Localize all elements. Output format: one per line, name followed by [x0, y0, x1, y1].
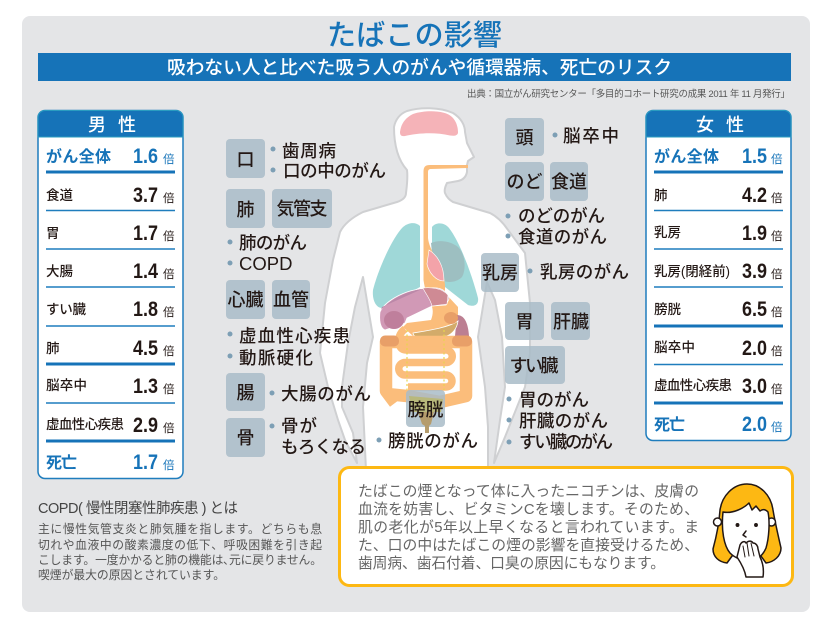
label: lung and bronchi: COPD: [239, 253, 292, 274]
panel: male table: 1.7: [133, 451, 158, 474]
panel: female table: 倍: [771, 268, 783, 281]
nose: [743, 531, 746, 537]
label: heart and vessels: 動脈硬化: [239, 348, 313, 368]
label: stomach liver pancreas: [505, 302, 613, 452]
label: intestine: 腸: [236, 383, 254, 403]
organ: gallbladder: [384, 311, 404, 329]
female header: 性: [726, 115, 744, 135]
panel: male table: 倍: [163, 268, 175, 281]
label: bone: 骨: [236, 428, 254, 448]
panel: female table: 4.2: [742, 184, 767, 207]
icon: woman covering mouth: [713, 484, 781, 577]
COPD explanation: 喫煙が最大の原因とされています。: [38, 568, 225, 582]
panel: male table: 倍: [163, 230, 175, 243]
eyes: [736, 524, 739, 526]
panel: female table: 虚血性心疾患: [654, 378, 732, 393]
panel: male table: 大腸: [46, 264, 74, 279]
panel: male table: 倍: [163, 153, 175, 166]
label: head: 脳卒中: [563, 126, 619, 146]
panel: male table: 1.6: [133, 145, 158, 168]
panel: female table: 倍: [771, 421, 783, 434]
label: lung and bronchi: 気管支: [276, 199, 328, 219]
label: mouth: 口の中のがん: [283, 161, 386, 181]
hand: [737, 541, 763, 577]
label: mouth: 歯周病: [282, 141, 336, 161]
subtitle banner: 吸わない人と比べた吸う人のがんや循環器病、死亡のリスク: [167, 57, 672, 78]
label: lung and bronchi: 肺のがん: [239, 233, 307, 253]
label: heart and vessels: [226, 280, 350, 368]
face: [722, 503, 769, 561]
COPD explanation: [38, 500, 322, 582]
callout: nicotine: 肌の老化が5年以上早くなると言われています。ま: [358, 519, 699, 536]
label: throat and esophagus: [505, 162, 607, 247]
panel: female table: 2.0: [742, 337, 767, 360]
panel: male table: 脳卒中: [46, 378, 87, 393]
body illustration: [320, 108, 530, 470]
organ: liver: [380, 288, 449, 330]
label: head: [505, 118, 619, 156]
label: intestine: [226, 373, 371, 411]
organ: right lung: [432, 223, 478, 306]
label: stomach liver pancreas: 肝臓: [553, 312, 589, 332]
panel: male table: 倍: [163, 422, 175, 435]
organ: stomach overlap: [423, 288, 448, 306]
label: stomach liver pancreas: 胃のがん: [519, 390, 589, 410]
panel: male table: 倍: [163, 192, 175, 205]
panel: female table: 6.5: [742, 298, 767, 321]
label: mouth: 口: [236, 150, 254, 170]
label: bladder: [376, 390, 478, 451]
panel: female table: 死亡: [654, 416, 685, 434]
panel: female table: 2.0: [742, 413, 767, 436]
organ: colon overlap shading: [380, 312, 472, 346]
organ: pancreas: [413, 321, 458, 338]
organ: large intestine: [386, 342, 466, 403]
organ: left lung: [373, 223, 420, 308]
organ: bladder: [409, 396, 443, 412]
organ: esophagus and stomach: [403, 165, 468, 337]
COPD explanation: こします。一度かかると肺の機能は､元に戻りません。: [38, 553, 322, 567]
label: stomach liver pancreas: 肝臓のがん: [519, 411, 608, 431]
COPD explanation: COPD( 慢性閉塞性肺疾患 ) とは: [38, 500, 238, 517]
panel: male table: 倍: [163, 345, 175, 358]
callout: nicotine: 歯周病、歯石付着、口臭の原因にもなります。: [358, 555, 665, 572]
label: heart and vessels: 虚血性心疾患: [239, 326, 350, 346]
panel: female table: 1.5: [742, 145, 767, 168]
ears: [714, 518, 722, 526]
callout: nicotine: たばこの煙となって体に入ったニコチンは、皮膚の: [358, 483, 699, 500]
panel: female table: 3.0: [742, 375, 767, 398]
source note: 出典：国立がん研究センター「多目的コホート研究の成果 2011 年 11 月発行」: [467, 88, 790, 100]
label: stomach liver pancreas: すい臓: [510, 356, 558, 376]
panel: male table: 倍: [163, 306, 175, 319]
panel: female table: 倍: [771, 345, 783, 358]
panel: female table: 乳房(閉経前): [654, 263, 730, 279]
label: bone: [226, 416, 366, 457]
male header: 男: [88, 115, 106, 135]
panel: female table: 倍: [771, 383, 783, 396]
label: heart and vessels: 血管: [273, 290, 309, 310]
label: bone: 骨が: [281, 416, 318, 436]
panel: male table: 食道: [46, 188, 74, 203]
callout: nicotine: た、口の中はたばこの煙の影響を直接受けるため、: [358, 537, 699, 554]
label: intestine: 大腸のがん: [281, 384, 371, 404]
COPD explanation: 切れや血液中の酸素濃度の低下、呼吸困難を引き起: [38, 538, 322, 552]
panel: female table: [646, 110, 791, 440]
label: heart and vessels: 心臓: [228, 290, 264, 310]
label: lung and bronchi: 肺: [236, 200, 254, 220]
panel: male table: 死亡: [46, 454, 77, 472]
organ: brain: [400, 111, 458, 136]
label: mouth: [226, 139, 386, 181]
label: breast: [481, 253, 629, 292]
female header: 女: [696, 115, 714, 135]
panel: male table: 倍: [163, 459, 175, 472]
panel: female table: 乳房: [654, 225, 681, 240]
label: stomach liver pancreas: すい臓のがん: [519, 432, 613, 452]
panel: female table: 倍: [771, 306, 783, 319]
panel: female table: 肺: [654, 188, 668, 203]
label: throat and esophagus: のど: [506, 172, 542, 192]
panel: male table: 1.3: [133, 375, 158, 398]
organ: small intestine: [399, 329, 452, 387]
callout: nicotine: 血流を妨害し、ビタミンCを壊します。そのため、: [358, 501, 699, 518]
label: head: 頭: [516, 128, 534, 148]
panel: male table: 2.9: [133, 414, 158, 437]
label: bladder: 膀胱: [408, 400, 444, 420]
title: たばこの影響: [327, 19, 502, 52]
female header: [646, 110, 791, 137]
panel: male table: 1.8: [133, 298, 158, 321]
panel: male table: 1.7: [133, 222, 158, 245]
COPD explanation: 主に慢性気管支炎と肺気腫を指します。どちらも息: [38, 522, 322, 536]
panel: male table: 肺: [46, 341, 60, 356]
panel: female table: 膀胱: [654, 301, 682, 317]
panel: female table: がん全体: [654, 147, 719, 166]
panel: male table: 倍: [163, 383, 175, 396]
organ: heart: [427, 250, 444, 281]
label: stomach liver pancreas: 胃: [516, 312, 534, 332]
label: throat and esophagus: のどのがん: [518, 206, 605, 226]
label: lung and bronchi: [226, 189, 332, 274]
organ: spleen: [455, 315, 469, 336]
body silhouette: [320, 108, 530, 470]
panel: female table: 倍: [771, 230, 783, 243]
male header: 性: [118, 115, 136, 135]
panel: female table: 脳卒中: [654, 340, 695, 355]
panel: female table: 1.9: [742, 222, 767, 245]
panel: male table: 3.7: [133, 184, 158, 207]
panel: male table: 1.4: [133, 260, 158, 283]
panel: male table: 4.5: [133, 337, 158, 360]
panel: male table: がん全体: [46, 147, 111, 166]
label: bone: もろくなる: [281, 437, 366, 457]
panel: male table: [38, 110, 183, 478]
label: breast: 乳房のがん: [540, 262, 629, 282]
organ: liver overlap band: [381, 289, 422, 310]
panel: male table: 胃: [46, 226, 60, 241]
callout: nicotine: [340, 468, 792, 586]
organ: bladder base: [418, 412, 434, 433]
panel: female table: 3.9: [742, 260, 767, 283]
hair: [713, 484, 781, 563]
male header: [38, 110, 183, 137]
label: throat and esophagus: 食道: [551, 172, 587, 192]
panel: female table: 倍: [771, 192, 783, 205]
label: bladder: 膀胱のがん: [388, 431, 478, 451]
organ: breast overlay: [431, 241, 465, 282]
label: breast: 乳房: [482, 263, 518, 283]
organ: dotted ureters: [407, 330, 444, 390]
panel: male table: すい臓: [46, 302, 86, 317]
label: throat and esophagus: 食道のがん: [518, 227, 607, 247]
subtitle banner: [38, 53, 791, 81]
panel: male table: 虚血性心疾患: [46, 417, 124, 432]
panel: female table: 倍: [771, 153, 783, 166]
